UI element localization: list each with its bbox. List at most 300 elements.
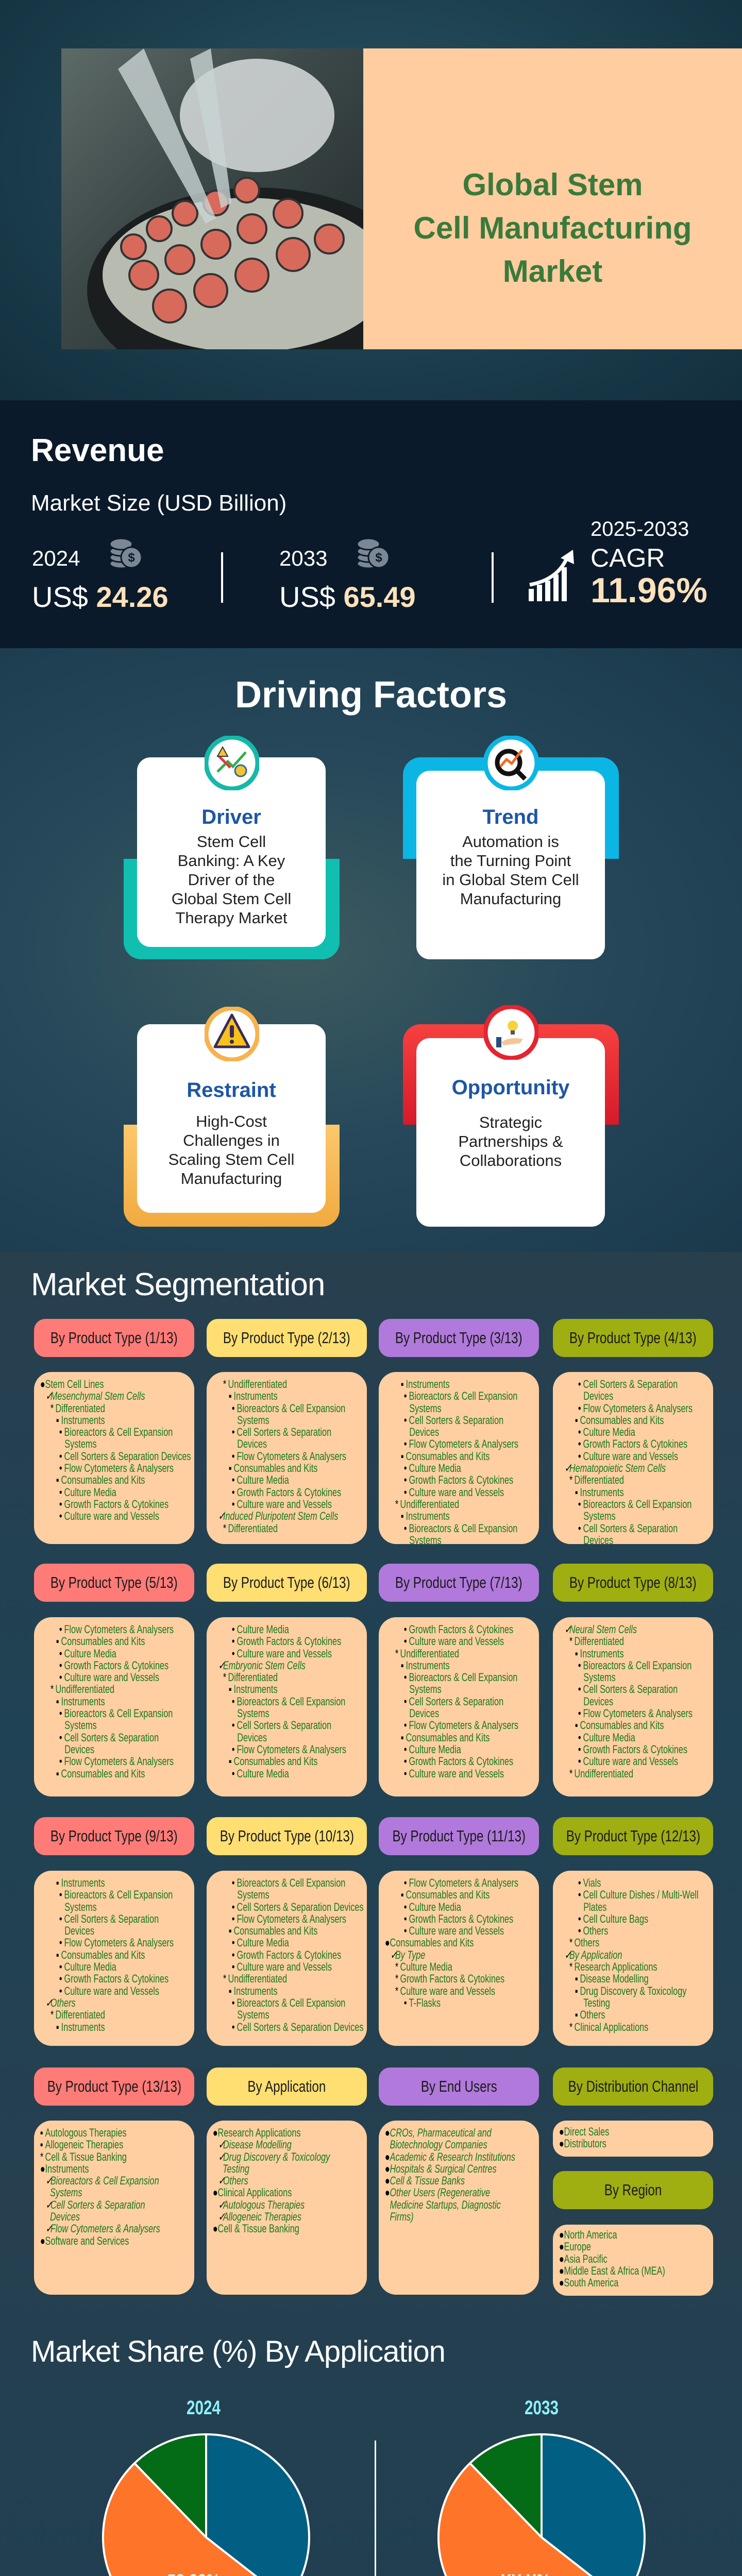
segmentation row 3 boxes: T-Flasks xyxy=(409,1996,441,2009)
segmentation row 2 boxes: Growth Factors & Cytokines xyxy=(409,1623,513,1636)
year label 2024: 2024 xyxy=(187,2397,221,2419)
CAGR xyxy=(591,518,707,610)
icon: driver xyxy=(205,736,259,790)
revenue block xyxy=(31,433,707,613)
segmentation row 3 boxes: By Application xyxy=(569,1948,622,1961)
segmentation row 3 boxes: Culture ware and Vessels xyxy=(237,1960,332,1973)
segmentation row 1 boxes: Culture Media xyxy=(409,1462,461,1475)
segmentation row 1 boxes: Stem Cell Lines xyxy=(45,1378,104,1391)
segmentation row 1 boxes: • xyxy=(59,1498,62,1511)
segmentation row 4 boxes xyxy=(34,2121,713,2295)
segmentation row 1 boxes: ▪ xyxy=(401,1378,404,1391)
segmentation row 2 boxes: • xyxy=(404,1695,407,1708)
segmentation row 1 boxes: • xyxy=(232,1486,235,1499)
segmentation row 4 headers: By Product Type (13/13) xyxy=(47,2077,181,2095)
segmentation row 4 boxes: Cell & Tissue Banking xyxy=(45,2150,127,2163)
segmentation row 4 boxes: Hospitals & Surgical Centres xyxy=(390,2162,497,2175)
segmentation row 4 boxes: ✓ xyxy=(45,2174,53,2187)
segmentation row 2 boxes: * xyxy=(395,1647,398,1660)
panel: trend: Trend xyxy=(483,806,538,828)
icon: opportunity xyxy=(484,1005,538,1060)
segmentation row 3 boxes: * xyxy=(395,1960,398,1973)
segmentation row 2 boxes: • xyxy=(232,1767,235,1780)
segmentation row 3 boxes: Growth Factors & Cytokines xyxy=(409,1912,513,1925)
box: regions: Middle East & Africa (MEA) xyxy=(564,2264,665,2277)
panel: restraint: Restraint xyxy=(187,1079,276,1101)
segmentation row 3 boxes: Consumables and Kits xyxy=(390,1936,474,1949)
segmentation row 4 headers xyxy=(34,2067,713,2106)
segmentation row 2 boxes: Undifferentiated xyxy=(574,1767,633,1780)
segmentation row 1 boxes: * xyxy=(223,1378,226,1391)
segmentation row 2 boxes: Growth Factors & Cytokines xyxy=(409,1755,513,1768)
segmentation row 2 boxes: • xyxy=(232,1647,235,1660)
segmentation row 2 boxes: ▪ xyxy=(56,1635,59,1648)
pie chart: application 2024 xyxy=(102,2433,310,2576)
segmentation row 2 boxes: Flow Cytometers & Analysers xyxy=(64,1755,174,1768)
segmentation row 4 boxes: Distributors xyxy=(564,2137,606,2150)
segmentation row 2 boxes: ▪ xyxy=(401,1659,404,1672)
segmentation row 4 boxes: Autologous Therapies xyxy=(223,2198,305,2211)
panel: opportunity: Strategic xyxy=(479,1113,542,1131)
segmentation row 2 boxes: Cell Sorters & Separation xyxy=(583,1683,678,1696)
segmentation row 2 boxes: Systems xyxy=(583,1671,616,1684)
segmentation row 3 boxes: Growth Factors & Cytokines xyxy=(400,1972,504,1985)
segmentation row 1 boxes: ✓ xyxy=(564,1462,571,1475)
segmentation row 3 boxes: Flow Cytometers & Analysers xyxy=(409,1876,518,1889)
segmentation row 1 boxes: • xyxy=(232,1402,235,1415)
panel: restraint: High-Cost xyxy=(196,1112,267,1130)
2024 value: 2024 xyxy=(32,546,80,570)
segmentation row 3 boxes: Others xyxy=(50,1996,76,2009)
segmentation row 3 boxes: Bioreactors & Cell Expansion xyxy=(237,1876,345,1889)
segmentation row 1 boxes: Cell Sorters & Separation Devices xyxy=(64,1450,191,1463)
segmentation row 2 boxes: Bioreactors & Cell Expansion xyxy=(409,1671,517,1684)
title panel xyxy=(363,48,742,349)
segmentation row 2 boxes: ▪ xyxy=(229,1755,232,1768)
segmentation row 2 boxes: Bioreactors & Cell Expansion xyxy=(237,1695,345,1708)
segmentation row 3 boxes: Devices xyxy=(64,1924,94,1937)
segmentation row 3 boxes: Drug Discovery & Toxicology xyxy=(580,1985,686,1997)
segmentation row 3 boxes: • xyxy=(404,1901,407,1913)
panel: restraint: Scaling Stem Cell xyxy=(168,1150,294,1168)
segmentation row 1 headers: By Product Type (1/13) xyxy=(50,1329,178,1347)
segmentation row 4 boxes: Software and Services xyxy=(45,2234,129,2247)
segmentation row 1 boxes: ▪ xyxy=(56,1473,59,1486)
panel: driver: Stem Cell xyxy=(197,833,266,851)
segmentation row 3 headers: By Product Type (11/13) xyxy=(392,1827,526,1845)
segmentation row 4 boxes: Research Applications xyxy=(217,2126,301,2139)
segmentation row 1 boxes: ▪ xyxy=(575,1486,578,1499)
panel: driver xyxy=(124,736,340,959)
segmentation row 2 boxes: Consumables and Kits xyxy=(406,1731,490,1744)
icon: coins xyxy=(110,539,141,568)
segmentation row 1 boxes: Systems xyxy=(409,1402,442,1415)
segmentation row 3 boxes: ▪ xyxy=(575,2008,578,2021)
segmentation row 2 boxes: Culture ware and Vessels xyxy=(583,1755,678,1768)
year label 2033: 2033 xyxy=(525,2397,559,2419)
segmentation row 2 boxes: • xyxy=(578,1743,581,1756)
segmentation row 1 boxes: * xyxy=(569,1473,572,1486)
segmentation row 3 boxes: ▪ xyxy=(401,1888,404,1901)
segmentation row 1 boxes: ● xyxy=(40,1378,45,1391)
segmentation row 3 boxes: ▪ xyxy=(229,1985,232,1997)
segmentation row 2 boxes: Devices xyxy=(64,1743,94,1756)
segmentation row 2 boxes: Culture Media xyxy=(409,1743,461,1756)
divider xyxy=(375,2441,376,2576)
segmentation row 4 boxes: ✓ xyxy=(218,2150,225,2163)
segmentation row 3 boxes: ▪ xyxy=(575,1985,578,1997)
segmentation row 4 boxes: Disease Modelling xyxy=(223,2138,292,2151)
segmentation row 2 boxes xyxy=(34,1617,713,1797)
segmentation row 3 boxes: Others xyxy=(583,1924,608,1937)
segmentation row 1 boxes: • xyxy=(59,1510,62,1522)
2033 value: US$ 65.49 xyxy=(279,581,416,613)
segmentation row 3 boxes: • xyxy=(232,1948,235,1961)
segmentation row 4 boxes: Testing xyxy=(223,2162,249,2175)
background: header xyxy=(0,0,742,400)
segmentation row 2 boxes: • xyxy=(404,1743,407,1756)
segmentation row 1 boxes: • xyxy=(578,1437,581,1450)
segmentation row 1 boxes: * xyxy=(395,1498,398,1511)
segmentation row 3 boxes: Undifferentiated xyxy=(228,1972,287,1985)
segmentation row 2 boxes: Devices xyxy=(409,1707,439,1720)
segmentation row 3 boxes: * xyxy=(569,2021,572,2033)
box: regions xyxy=(553,2225,713,2296)
segmentation row 4 boxes: ● xyxy=(213,2222,218,2235)
segmentation row 2 boxes: ▪ xyxy=(575,1719,578,1732)
panel: driver: Driver of the xyxy=(188,871,275,889)
segmentation row 1 headers: By Product Type (2/13) xyxy=(223,1329,350,1347)
2024 value xyxy=(32,539,168,613)
segmentation row 1 boxes: Instruments xyxy=(406,1510,450,1522)
segmentation row 1 boxes: Systems xyxy=(64,1437,97,1450)
segmentation row 3 boxes: ✓ xyxy=(45,1996,53,2009)
divider xyxy=(492,552,494,603)
segmentation row 2 boxes: • xyxy=(578,1731,581,1744)
segmentation row 3 boxes: • xyxy=(232,1876,235,1889)
segmentation row 2 headers: By Product Type (5/13) xyxy=(50,1573,178,1591)
segmentation row 1 boxes: Culture ware and Vessels xyxy=(237,1498,332,1511)
section heading: by application: Market Share (%) By Application xyxy=(31,2335,445,2368)
segmentation row 2 boxes: Culture Media xyxy=(64,1647,116,1660)
segmentation row 2 boxes: • xyxy=(59,1731,62,1744)
segmentation row 1 boxes: Culture ware and Vessels xyxy=(409,1486,504,1499)
segmentation row 1 boxes: • xyxy=(59,1426,62,1438)
segmentation row 3 headers: By Product Type (9/13) xyxy=(50,1827,178,1845)
segmentation row 1 boxes: • xyxy=(404,1486,407,1499)
segmentation row 2 boxes: Cell Sorters & Separation xyxy=(64,1731,159,1744)
segmentation row 1 boxes: Devices xyxy=(583,1389,613,1402)
segmentation row 3 boxes: • xyxy=(59,1985,62,1997)
panel: driver: Global Stem Cell xyxy=(172,890,291,908)
icon: coins: $ xyxy=(128,551,135,565)
segmentation row 4 boxes: ● xyxy=(385,2174,390,2187)
segmentation row 1 boxes: Instruments xyxy=(234,1389,278,1402)
panel: trend: Automation is xyxy=(462,833,559,851)
title panel: Global Stem xyxy=(462,167,643,202)
segmentation row 1 boxes: Undifferentiated xyxy=(400,1498,459,1511)
segmentation row 1 boxes: Devices xyxy=(237,1437,267,1450)
segmentation row 2 boxes: Bioreactors & Cell Expansion xyxy=(583,1659,692,1672)
segmentation row 3 boxes: Systems xyxy=(64,1901,97,1913)
segmentation row 1 boxes: • xyxy=(404,1414,407,1427)
segmentation row 4 boxes: Academic & Research Institutions xyxy=(390,2150,515,2163)
segmentation row 4 boxes: Systems xyxy=(50,2186,82,2199)
segmentation row 3 boxes: • xyxy=(578,1876,581,1889)
segmentation row 1 boxes: • xyxy=(578,1498,581,1511)
segmentation row 3 boxes: Testing xyxy=(583,1996,610,2009)
segmentation row 1 boxes: • xyxy=(578,1450,581,1463)
panel: restraint xyxy=(124,1007,340,1227)
segmentation row 1 headers: By Product Type (4/13) xyxy=(569,1329,697,1347)
segmentation row 3 headers: By Product Type (12/13) xyxy=(566,1827,700,1845)
segmentation row 1 boxes: Growth Factors & Cytokines xyxy=(583,1437,687,1450)
market size label: Market Size (USD Billion) xyxy=(31,490,286,516)
segmentation row 4 boxes: * xyxy=(40,2150,43,2163)
segmentation row 4 boxes: Cell & Tissue Banking xyxy=(217,2222,299,2235)
segmentation row 4 boxes: ✓ xyxy=(218,2198,225,2211)
segmentation row 4 boxes: Biotechnology Companies xyxy=(390,2138,487,2151)
segmentation row 2 boxes: • xyxy=(59,1755,62,1768)
segmentation row 3 boxes: By Type xyxy=(395,1948,425,1961)
segmentation row 1 boxes xyxy=(34,1372,713,1544)
segmentation row 3 boxes: • xyxy=(232,1901,235,1913)
segmentation row 2 boxes: • xyxy=(59,1659,62,1672)
segmentation row 4 boxes: Instruments xyxy=(45,2162,89,2175)
segmentation row 1 boxes: Differentiated xyxy=(228,1522,278,1535)
CAGR: 2025-2033 xyxy=(591,518,689,540)
segmentation row 3 boxes: • xyxy=(59,1912,62,1925)
segmentation row 3 boxes: • xyxy=(232,1936,235,1949)
panel: trend: in Global Stem Cell xyxy=(442,871,579,889)
segmentation row 2 boxes: Instruments xyxy=(406,1659,450,1672)
segmentation row 2 boxes: • xyxy=(404,1755,407,1768)
segmentation row 1 boxes: Consumables and Kits xyxy=(61,1473,145,1486)
segmentation row 3 boxes: • xyxy=(404,1996,407,2009)
segmentation row 4 boxes: Drug Discovery & Toxicology xyxy=(223,2150,330,2163)
segmentation row 3 boxes: • xyxy=(578,1924,581,1937)
segmentation row 2 boxes: Systems xyxy=(64,1719,97,1732)
segmentation row 2 boxes: Consumables and Kits xyxy=(61,1635,145,1648)
segmentation row 2 headers: By Product Type (8/13) xyxy=(569,1573,697,1591)
segmentation row 2 boxes: • xyxy=(404,1719,407,1732)
header photo xyxy=(61,48,363,349)
segmentation row 3 boxes: Flow Cytometers & Analysers xyxy=(64,1936,174,1949)
segmentation row 1 boxes: Instruments xyxy=(580,1486,624,1499)
segmentation row 4 boxes: Medicine Startups, Diagnostic xyxy=(390,2198,501,2211)
segmentation row 3 boxes: Consumables and Kits xyxy=(61,1948,145,1961)
background: driving factors xyxy=(0,648,742,1252)
segmentation row 3 boxes: Cell Sorters & Separation xyxy=(64,1912,159,1925)
segmentation row 3 boxes: Cell Culture Dishes / Multi-Well xyxy=(583,1888,699,1901)
segmentation row 1 boxes: • xyxy=(404,1522,407,1535)
segmentation row 1 boxes: Differentiated xyxy=(574,1473,624,1486)
segmentation row 2 boxes: Differentiated xyxy=(228,1671,278,1684)
icon: trend xyxy=(484,736,538,790)
segmentation row 1 boxes: • xyxy=(404,1389,407,1402)
segmentation row 3 boxes: * xyxy=(223,1972,226,1985)
segmentation row 3 boxes: Differentiated xyxy=(55,2008,105,2021)
segmentation row 3 boxes: * xyxy=(50,2008,54,2021)
box: regions: North America xyxy=(564,2228,617,2241)
segmentation row 1 boxes: Bioreactors & Cell Expansion xyxy=(64,1426,173,1438)
segmentation row 2 boxes: Growth Factors & Cytokines xyxy=(583,1743,687,1756)
segmentation row 2 boxes: Undifferentiated xyxy=(400,1647,459,1660)
segmentation row 4 boxes: Allogeneic Therapies xyxy=(45,2138,123,2151)
segmentation row 2 boxes: ▪ xyxy=(56,1767,59,1780)
segmentation row 3 boxes: ▪ xyxy=(575,1972,578,1985)
segmentation row 1 boxes: Instruments xyxy=(406,1378,450,1391)
panel: driver: Banking: A Key xyxy=(178,852,285,870)
segmentation row 3 boxes: ✓ xyxy=(390,1948,397,1961)
segmentation row 1 boxes: • xyxy=(59,1462,62,1475)
segmentation row 4 boxes: ✓ xyxy=(45,2222,53,2235)
driving factors heading: Driving Factors xyxy=(235,674,507,716)
segmentation row 3 boxes: • xyxy=(578,1912,581,1925)
segmentation row 2 boxes: • xyxy=(232,1695,235,1708)
revenue heading: Revenue xyxy=(31,433,164,468)
segmentation row 3 boxes: Instruments xyxy=(234,1985,278,1997)
segmentation row 1 boxes: Bioreactors & Cell Expansion xyxy=(409,1522,517,1535)
segmentation row 3 boxes: Bioreactors & Cell Expansion xyxy=(237,1996,345,2009)
segmentation row 3 boxes: Disease Modelling xyxy=(580,1972,649,1985)
segmentation row 3 boxes: ▪ xyxy=(229,1924,232,1937)
segmentation row 2 boxes: * xyxy=(50,1683,54,1696)
segmentation row 1 boxes: Bioreactors & Cell Expansion xyxy=(237,1402,345,1415)
segmentation row 2 boxes: Culture Media xyxy=(237,1767,289,1780)
segmentation row 4 boxes: Clinical Applications xyxy=(217,2186,292,2199)
segmentation row 1 boxes: • xyxy=(232,1426,235,1438)
segmentation row 1 boxes: Growth Factors & Cytokines xyxy=(409,1473,513,1486)
segmentation row 2 boxes: ✓ xyxy=(564,1623,571,1636)
segmentation row 2 boxes: Culture ware and Vessels xyxy=(409,1767,504,1780)
segmentation row 1 boxes: Flow Cytometers & Analysers xyxy=(64,1462,174,1475)
segmentation row 1 boxes: Differentiated xyxy=(55,1402,105,1415)
segmentation row 2 boxes: • xyxy=(404,1635,407,1648)
icon: coins xyxy=(358,539,389,568)
segmentation row 4 boxes: ● xyxy=(385,2126,390,2139)
segmentation row 2 headers: By Product Type (7/13) xyxy=(395,1573,522,1591)
segmentation row 2 boxes: Growth Factors & Cytokines xyxy=(237,1635,341,1648)
segmentation row 2 boxes: • xyxy=(404,1623,407,1636)
segmentation row 4 boxes: ● xyxy=(385,2150,390,2163)
segmentation row 3 boxes: * xyxy=(395,1972,398,1985)
segmentation row 1 boxes: Systems xyxy=(583,1510,616,1522)
segmentation row 2 boxes: • xyxy=(232,1635,235,1648)
segmentation row 2 boxes: ▪ xyxy=(56,1695,59,1708)
segmentation row 1 boxes: Cell Sorters & Separation xyxy=(409,1414,503,1427)
panel: opportunity: Opportunity xyxy=(452,1076,569,1099)
segmentation row 2 boxes: Cell Sorters & Separation xyxy=(409,1695,503,1708)
segmentation row 4 boxes: Devices xyxy=(50,2210,80,2223)
segmentation row 1 boxes: * xyxy=(223,1522,226,1535)
segmentation row 1 boxes: * xyxy=(50,1402,54,1415)
segmentation row 2 boxes: • xyxy=(578,1659,581,1672)
segmentation row 2 boxes: Devices xyxy=(237,1731,267,1744)
segmentation row 3 boxes: Vials xyxy=(583,1876,601,1889)
segmentation row 1 boxes: Culture Media xyxy=(64,1486,116,1499)
segmentation row 1 boxes: ▪ xyxy=(575,1414,578,1427)
segmentation row 4 boxes: ● xyxy=(385,2162,390,2175)
segmentation row 3 boxes: • xyxy=(232,1960,235,1973)
segmentation row 3 boxes: • xyxy=(404,1924,407,1937)
segmentation row 3 boxes: * xyxy=(569,1960,572,1973)
segmentation row 1 boxes: • xyxy=(404,1437,407,1450)
segmentation row 1 boxes: Systems xyxy=(237,1414,269,1427)
segmentation row 2 boxes: • xyxy=(59,1647,62,1660)
panel: opportunity: Collaborations xyxy=(460,1151,562,1170)
panel: trend xyxy=(403,736,619,959)
segmentation row 2 boxes: Culture ware and Vessels xyxy=(409,1635,504,1648)
segmentation row 3 boxes: Consumables and Kits xyxy=(406,1888,490,1901)
box: regions: ● xyxy=(559,2228,564,2241)
segmentation row 2 boxes: Culture ware and Vessels xyxy=(237,1647,332,1660)
2033 value xyxy=(279,539,416,613)
segmentation row 1 boxes: ✓ xyxy=(45,1389,53,1402)
segmentation row 1 boxes: • xyxy=(232,1450,235,1463)
segmentation row 1 boxes: Consumables and Kits xyxy=(580,1414,664,1427)
panel: restraint: Manufacturing xyxy=(181,1170,282,1188)
2024 value: US$ 24.26 xyxy=(32,581,168,613)
segmentation row 2 boxes: Bioreactors & Cell Expansion xyxy=(64,1707,173,1720)
segmentation row 1 boxes: • xyxy=(59,1486,62,1499)
icon: coins: $ xyxy=(375,551,382,565)
segmentation row 1 boxes: Culture ware and Vessels xyxy=(64,1510,159,1522)
segmentation row 3 boxes: Culture Media xyxy=(237,1936,289,1949)
segmentation row 3 boxes: • xyxy=(404,1876,407,1889)
segmentation row 1 boxes: Cell Sorters & Separation xyxy=(583,1522,678,1535)
segmentation row 2 boxes: ✓ xyxy=(218,1659,225,1672)
divider xyxy=(221,552,223,603)
segmentation row 4 boxes: Flow Cytometers & Analysers xyxy=(50,2222,160,2235)
segmentation row 2 boxes: Neural Stem Cells xyxy=(569,1623,637,1636)
segmentation row 3 boxes: Growth Factors & Cytokines xyxy=(237,1948,341,1961)
pie chart: application 2033 xyxy=(437,2433,646,2576)
segmentation row 1 boxes: • xyxy=(232,1498,235,1511)
segmentation row 3 headers: By Product Type (10/13) xyxy=(220,1827,354,1845)
segmentation row 3 boxes: Culture ware and Vessels xyxy=(409,1924,504,1937)
segmentation row 1 boxes: • xyxy=(404,1473,407,1486)
segmentation row 1 boxes: Culture Media xyxy=(237,1473,289,1486)
segmentation row 4 boxes: Cell Sorters & Separation xyxy=(50,2198,145,2211)
segmentation row 2 boxes: Instruments xyxy=(234,1683,278,1696)
segmentation row 3 boxes: ▪ xyxy=(56,1948,59,1961)
segmentation row 1 boxes: ▪ xyxy=(56,1414,59,1427)
segmentation row 3 boxes: Clinical Applications xyxy=(574,2021,648,2033)
segmentation row 2 boxes: Cell Sorters & Separation xyxy=(237,1719,331,1732)
segmentation row 3 boxes: * xyxy=(395,1985,398,1997)
segmentation row 2 boxes: Consumables and Kits xyxy=(61,1767,145,1780)
segmentation row 2 headers xyxy=(34,1564,713,1602)
segmentation row 2 boxes: Undifferentiated xyxy=(55,1683,114,1696)
segmentation row 4 boxes: ✓ xyxy=(45,2198,53,2211)
segmentation row 3 boxes: Consumables and Kits xyxy=(234,1924,317,1937)
icon: warning xyxy=(205,1007,259,1061)
segmentation row 3 boxes: • xyxy=(232,1996,235,2009)
segmentation row 4 boxes: ✓ xyxy=(218,2138,225,2151)
segmentation row 2 boxes: • xyxy=(404,1767,407,1780)
segmentation row 1 boxes: ▪ xyxy=(401,1450,404,1463)
segmentation row 1 boxes: Culture Media xyxy=(583,1426,635,1438)
segmentation row 3 boxes: Systems xyxy=(237,1888,269,1901)
segmentation row 3 boxes: • xyxy=(232,2021,235,2033)
segmentation row 2 boxes: • xyxy=(232,1623,235,1636)
segmentation row 1 boxes: ▪ xyxy=(229,1462,232,1475)
segmentation row 4 boxes: Bioreactors & Cell Expansion xyxy=(50,2174,159,2187)
segmentation row 2 boxes: Culture Media xyxy=(237,1623,289,1636)
2033 value: 2033 xyxy=(279,546,327,570)
segmentation row 4 boxes: ✓ xyxy=(218,2174,225,2187)
